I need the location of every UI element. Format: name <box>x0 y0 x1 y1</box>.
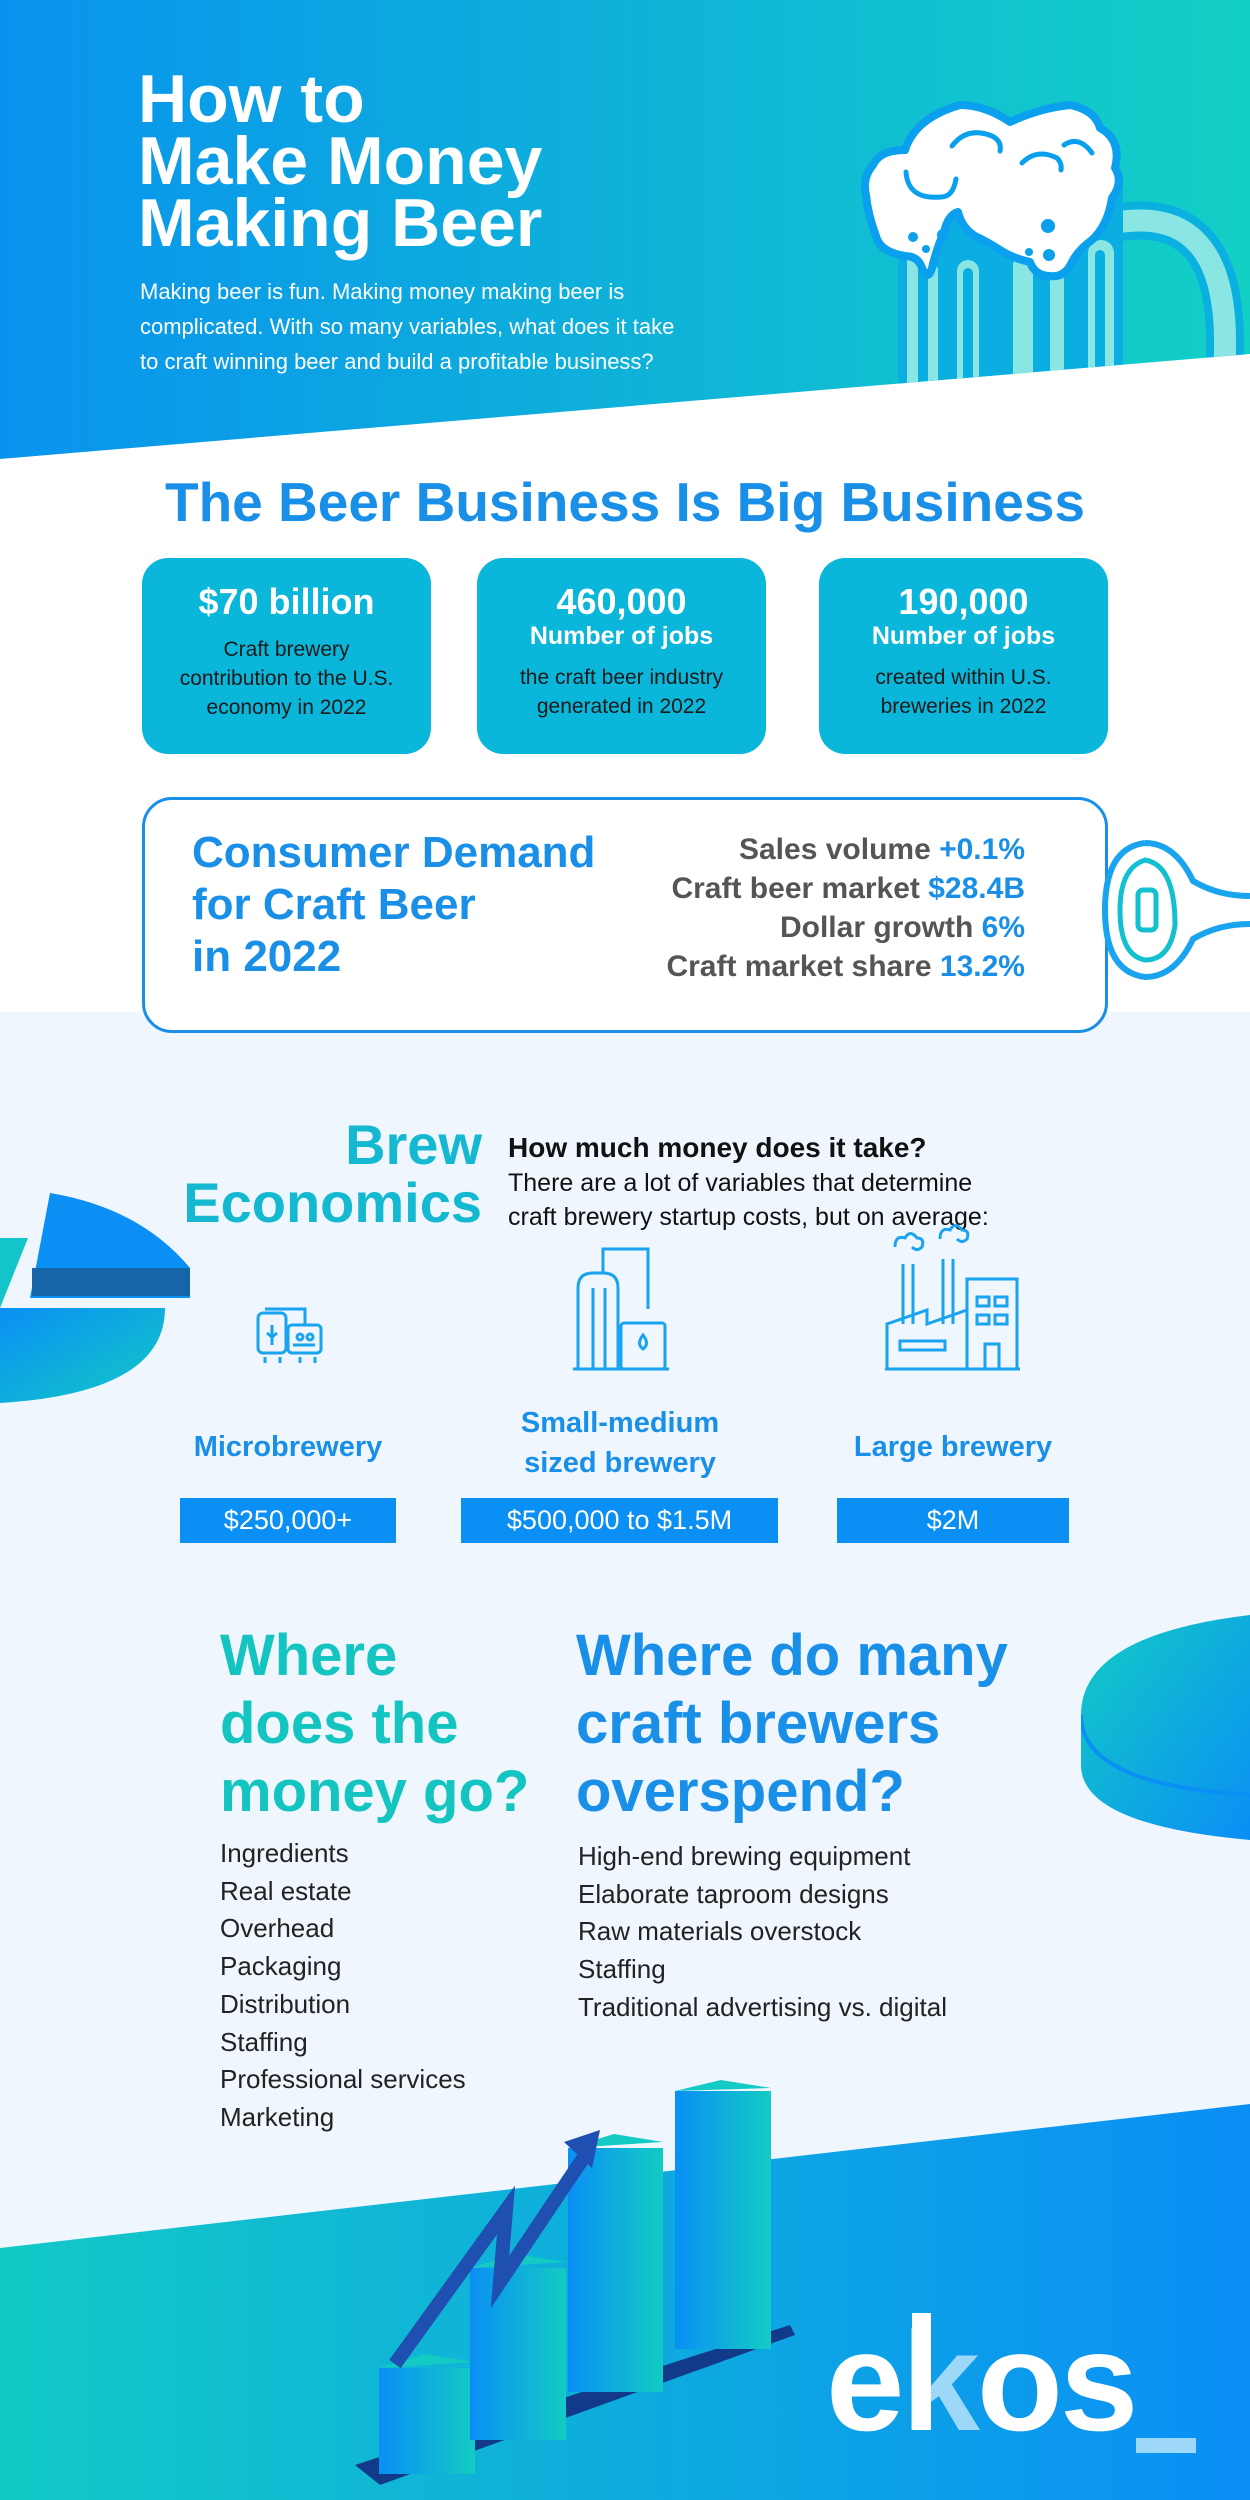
list: overspend: Traditional advertising vs. digital <box>578 1992 947 2022</box>
subtitle: to craft winning beer and build a profitable business? <box>140 349 654 374</box>
list: money go: Marketing <box>220 2102 334 2132</box>
footer band <box>0 2104 1250 2500</box>
title: How to <box>138 61 365 137</box>
heading: overspend: craft brewers <box>576 1691 940 1756</box>
card: 460,000: Number of jobs <box>530 622 713 650</box>
stats list: Craft beer market $28.4B <box>671 872 1025 905</box>
heading: overspend: overspend? <box>576 1759 905 1824</box>
heading: consumer demand <box>192 828 595 981</box>
list: money go: Ingredients <box>220 1838 349 1868</box>
list: money go: Staffing <box>220 2027 308 2057</box>
price: large <box>837 1498 1069 1543</box>
bar chart with arrow <box>355 2080 795 2485</box>
heading: brew economics: Brew <box>345 1113 482 1176</box>
label: small-medium: Small-medium <box>521 1407 719 1439</box>
icon: small-medium brewery <box>573 1248 669 1370</box>
price: micro: $250,000+ <box>224 1505 352 1535</box>
card: $70 billion: $70 billion <box>198 581 375 622</box>
card: 190,000: created within U.S. <box>875 666 1052 689</box>
list: overspend: Staffing <box>578 1954 666 1984</box>
label: small-medium <box>521 1407 719 1479</box>
card: 460,000: the craft beer industry <box>520 666 723 689</box>
pie chart right decoration <box>1081 1615 1250 1840</box>
title <box>138 61 542 261</box>
card: 460,000: generated in 2022 <box>537 695 706 718</box>
list: money go: Professional services <box>220 2064 466 2094</box>
list: money go: Distribution <box>220 1989 350 2019</box>
text: how much money: There are a lot of variables that determine <box>508 1169 972 1197</box>
card: 460,000 <box>477 558 766 754</box>
stats list: Sales volume +0.1% <box>739 833 1025 866</box>
heading: brew economics: Economics <box>183 1171 482 1234</box>
list: money go: Overhead <box>220 1913 334 1943</box>
stats list: Craft market share 13.2% <box>666 950 1025 983</box>
card: $70 billion: Craft brewery <box>223 638 350 661</box>
heading: consumer demand: Consumer Demand <box>192 828 595 877</box>
price: large: $2M <box>927 1505 979 1535</box>
label: microbrewery: Microbrewery <box>194 1431 382 1463</box>
stats list: Dollar growth 6% <box>780 911 1025 944</box>
card: 460,000: 460,000 <box>556 581 687 622</box>
card: $70 billion <box>142 558 431 754</box>
list: money go: Real estate <box>220 1876 352 1906</box>
subtitle: Making beer is fun. Making money making beer is <box>140 279 624 304</box>
header background with mug <box>0 0 1250 459</box>
list: overspend: Elaborate taproom designs <box>578 1879 889 1909</box>
title: Make Money <box>138 123 542 199</box>
logo underscore <box>1136 2438 1196 2453</box>
heading: consumer demand: for Craft Beer <box>192 880 476 929</box>
title: Making Beer <box>138 185 542 261</box>
heading: consumer demand: in 2022 <box>192 932 341 981</box>
panel: consumer demand <box>142 797 1108 1033</box>
logo k stem <box>912 2313 931 2430</box>
heading: where does the money go: money go? <box>220 1759 529 1824</box>
price: micro <box>180 1498 396 1543</box>
heading: where does the money go <box>220 1623 529 1824</box>
price: small-medium <box>461 1498 778 1543</box>
card: 190,000: breweries in 2022 <box>881 695 1046 718</box>
list: money go: Packaging <box>220 1951 341 1981</box>
heading: brew economics <box>183 1113 482 1234</box>
heading: overspend <box>576 1623 1008 1824</box>
card: 190,000 <box>819 558 1108 754</box>
text: how much money: craft brewery startup costs, but on average: <box>508 1203 989 1231</box>
section background light <box>0 1012 1250 2500</box>
heading: where does the money go: does the <box>220 1691 458 1756</box>
icon: microbrewery <box>256 1308 322 1363</box>
card: $70 billion: contribution to the U.S. <box>180 667 393 690</box>
card: 190,000: Number of jobs <box>872 622 1055 650</box>
price: small-medium: $500,000 to $1.5M <box>507 1505 732 1535</box>
list: overspend: High-end brewing equipment <box>578 1841 910 1871</box>
text: how much money: How much money does it take? <box>508 1132 927 1163</box>
card: 190,000: 190,000 <box>898 581 1029 622</box>
icon: bottle opener <box>1102 840 1250 980</box>
subtitle <box>140 279 674 374</box>
list: overspend <box>578 1841 947 2022</box>
stats list <box>666 833 1025 983</box>
text: how much money <box>508 1132 989 1231</box>
label: large: Large brewery <box>854 1431 1052 1463</box>
card: $70 billion: economy in 2022 <box>207 696 366 719</box>
icon: large brewery <box>885 1224 1020 1370</box>
heading: where does the money go: Where <box>220 1623 397 1688</box>
label: small-medium: sized brewery <box>524 1447 716 1479</box>
list: money go <box>220 1838 466 2132</box>
heading: overspend: Where do many <box>576 1623 1008 1688</box>
list: overspend: Raw materials overstock <box>578 1916 861 1946</box>
subtitle: complicated. With so many variables, what does it take <box>140 314 674 339</box>
pie chart left decoration <box>0 1193 190 1403</box>
heading: big business: The Beer Business Is Big Business <box>165 471 1085 533</box>
logo: ekos: ekos <box>826 2302 1135 2460</box>
